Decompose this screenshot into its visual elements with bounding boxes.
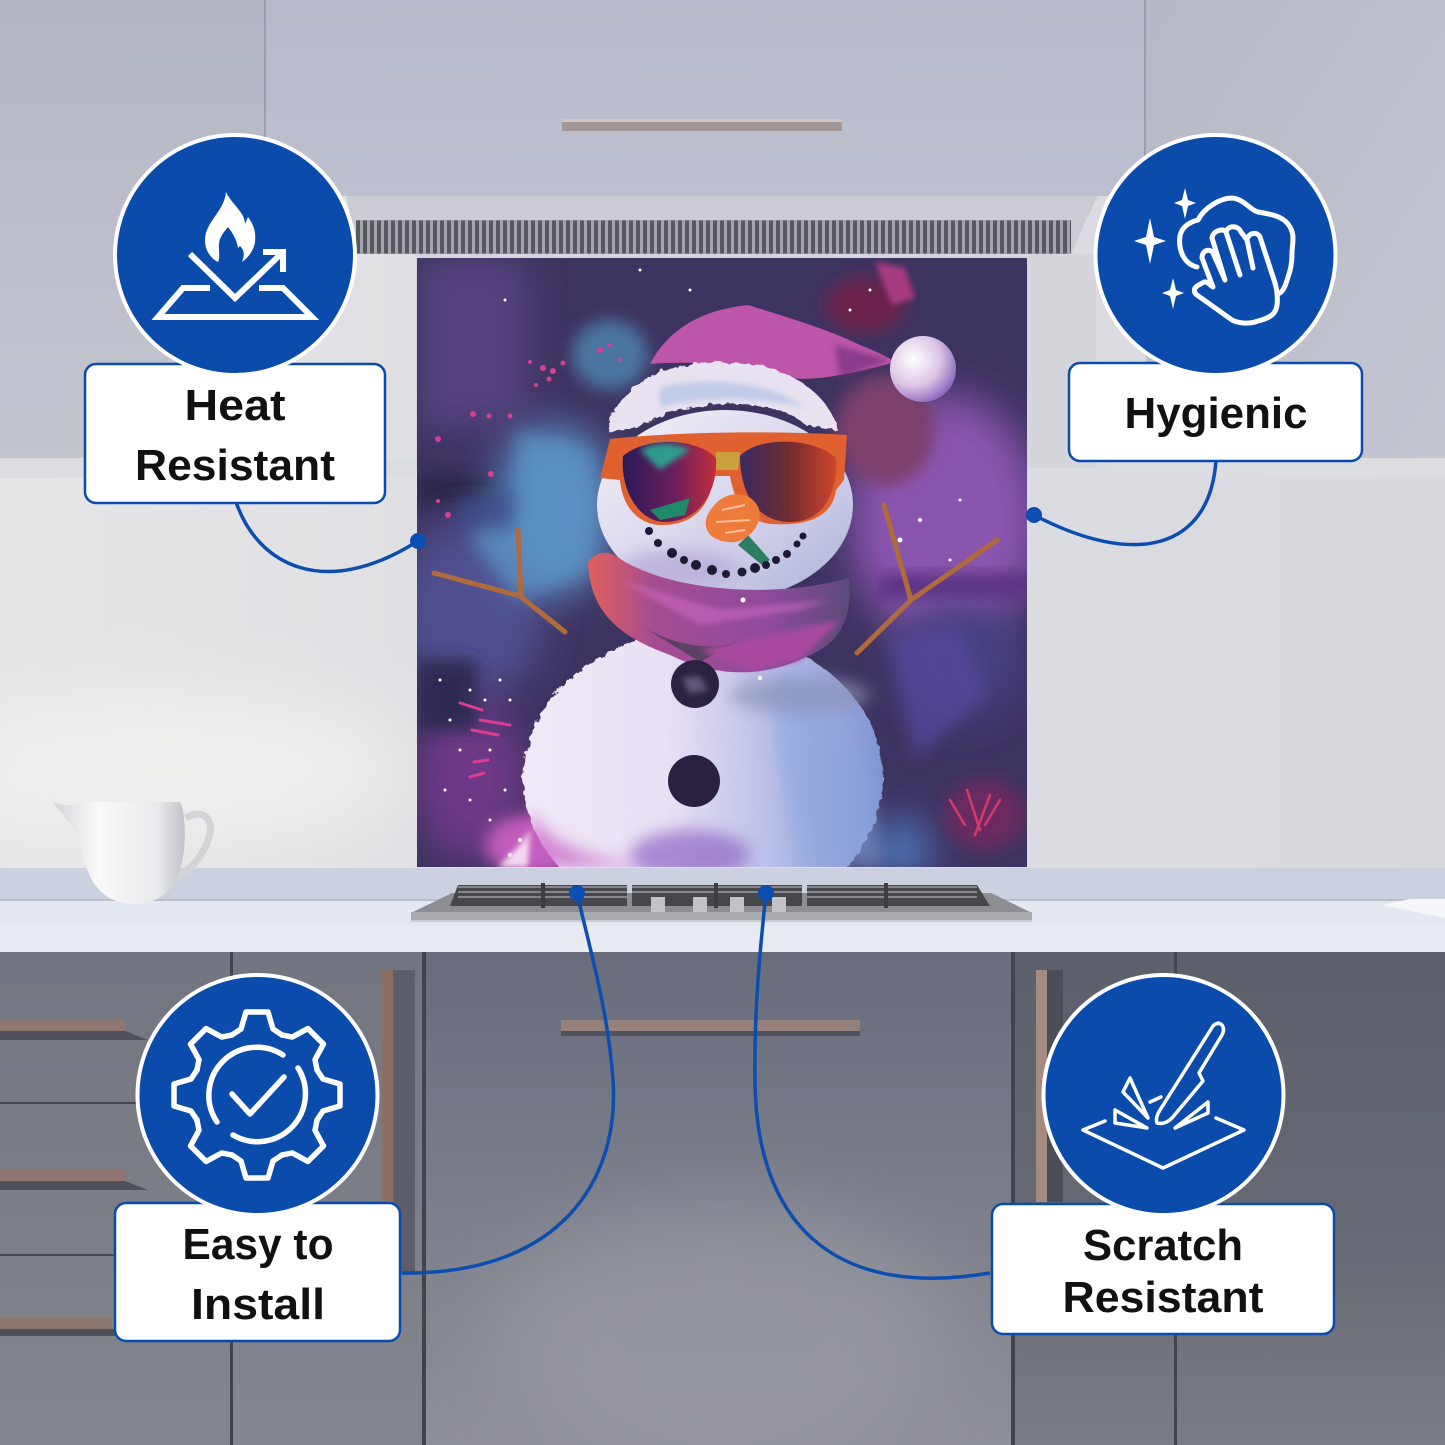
head xyxy=(597,410,853,600)
label: scratch resistant xyxy=(992,1204,1334,1334)
splatter xyxy=(435,268,1000,867)
label: easy to install: Easy to xyxy=(182,1220,334,1269)
jug xyxy=(52,802,211,904)
label: hygienic: Hygienic xyxy=(1124,389,1308,438)
connector: heat resistant xyxy=(236,502,426,572)
connector: scratch resistant xyxy=(755,885,990,1278)
label: easy to install: Install xyxy=(191,1280,325,1329)
hob xyxy=(411,883,1032,922)
label: scratch resistant: Resistant xyxy=(1062,1273,1264,1322)
artwork: snowman splashback xyxy=(417,258,1027,867)
carrot nose xyxy=(706,494,760,542)
icon: flame on surface xyxy=(115,135,355,375)
badge: heat resistant xyxy=(85,135,385,503)
scarf xyxy=(588,553,850,672)
snowman body xyxy=(521,640,886,867)
sunglasses xyxy=(600,432,847,525)
icon: gear with check xyxy=(138,975,378,1215)
badge: easy to install xyxy=(115,975,400,1341)
arms xyxy=(434,505,997,653)
label: heat resistant: Resistant xyxy=(135,441,335,490)
icon: knife scratching surface xyxy=(1044,975,1284,1215)
lower cabinets xyxy=(0,952,1445,1445)
label: easy to install xyxy=(115,1203,400,1341)
worktop xyxy=(0,868,1445,952)
cabinet handle xyxy=(562,119,842,131)
label: heat resistant xyxy=(85,364,385,503)
connector: hygienic xyxy=(1026,460,1216,545)
smile xyxy=(645,527,806,578)
icon: hand wiping xyxy=(1096,135,1336,375)
label: hygienic xyxy=(1069,363,1362,461)
badge: scratch resistant xyxy=(992,975,1334,1334)
label: scratch resistant: Scratch xyxy=(1083,1221,1243,1270)
buttons xyxy=(668,660,720,807)
connector: easy to install xyxy=(402,885,614,1273)
badge: hygienic xyxy=(1069,135,1362,461)
label: heat resistant: Heat xyxy=(184,381,286,430)
blue brush strokes xyxy=(455,430,985,760)
cooker hood xyxy=(346,196,1098,254)
hat xyxy=(608,305,956,431)
